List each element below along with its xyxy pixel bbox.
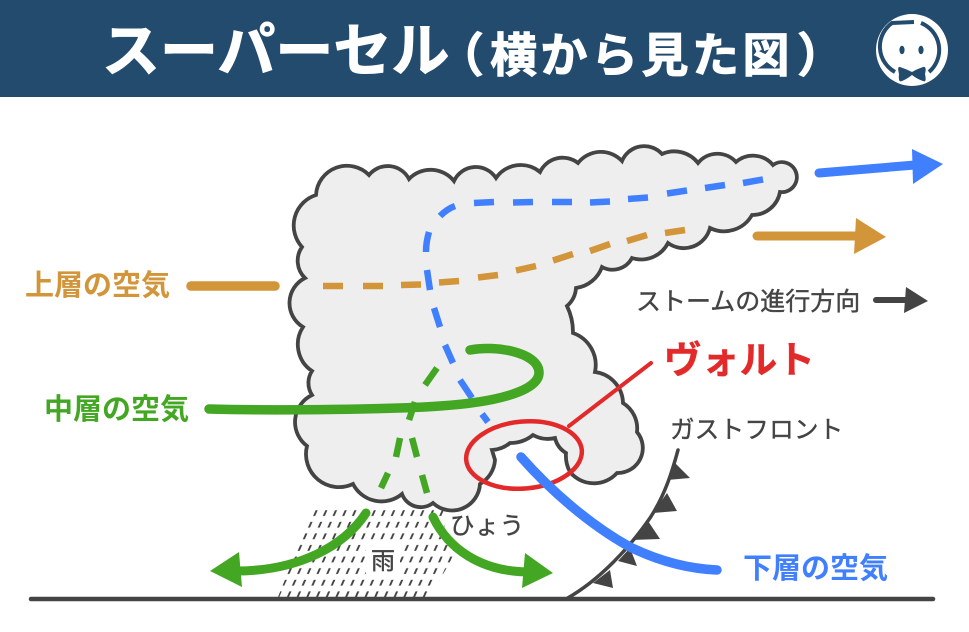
upper air outflow arrow orange [757,218,886,254]
icon: mascot logo [876,14,948,86]
label: hail: ひょう [450,513,524,540]
vault leader line [569,363,651,426]
label: low air: 下層の空気 [743,552,888,585]
title [102,19,844,84]
header bar [0,0,969,97]
title: ） [797,29,844,82]
label: upper air: 上層の空気 [25,269,170,302]
downdraft arrow left [210,513,366,587]
label: middle air: 中層の空気 [44,393,189,426]
rain area [278,507,454,597]
title: （ [437,29,484,82]
label: rain: 雨 [371,548,395,575]
vault callout ellipse [463,417,585,493]
title: 横から見た図 [490,29,793,82]
low air inflow line [521,457,717,570]
ground line [31,597,933,601]
title: スーパーセル [102,19,449,84]
storm direction arrow [876,287,928,313]
upper air dashed line [323,230,685,286]
upper air input line [191,281,275,291]
hail dashed paths [381,368,437,493]
label: storm direction: ストームの進行方向 [636,288,860,316]
upper outflow arrow blue [819,149,943,184]
label: vault: ヴォルト [664,339,815,381]
middle air arrow line [209,348,539,410]
label: gust front: ガストフロント [670,416,844,444]
gust front [566,450,690,599]
cloud [290,146,797,510]
low air dashed path through cloud [426,180,763,422]
downdraft arrow right [433,517,553,588]
